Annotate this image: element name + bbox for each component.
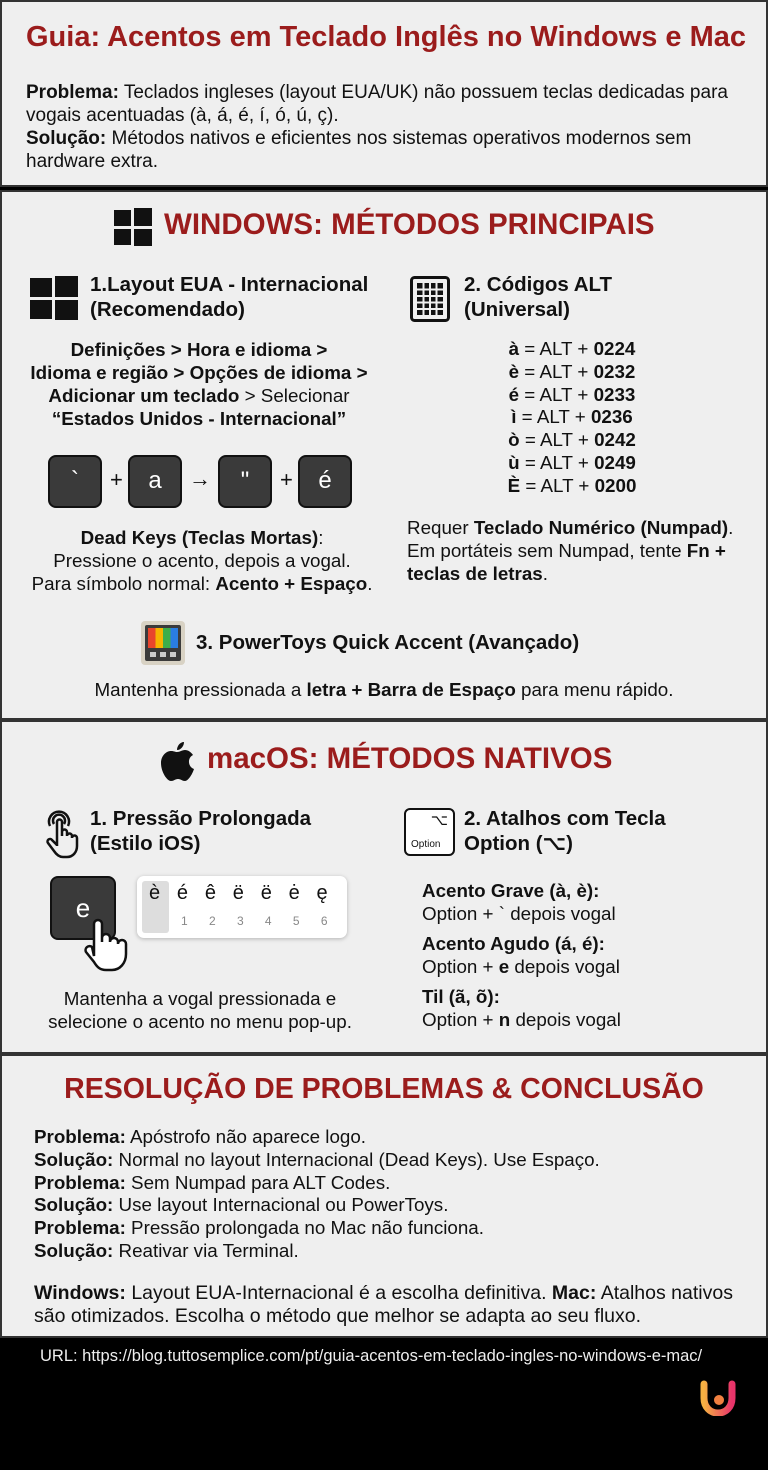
- method 1 heading: [30, 273, 368, 321]
- macos heading: macOS: MÉTODOS NATIVOS: [207, 742, 612, 775]
- intro text: Solução: Métodos nativos e eficientes nos sistemas operativos modernos sem: [26, 128, 691, 149]
- icon: apple: [161, 742, 194, 781]
- alt codes list: ì = ALT + 0236: [511, 406, 633, 427]
- footer url: URL: https://blog.tuttosemplice.com/pt/guia-acentos-em-teclado-ingles-no-windows-e-mac/: [40, 1347, 702, 1365]
- method 2 heading: [410, 273, 612, 322]
- numpad note: teclas de letras.: [407, 563, 548, 584]
- intro text: [26, 82, 728, 172]
- mac method 2 heading: 2. Atalhos com Tecla: [464, 807, 666, 830]
- panel: intro: [0, 0, 768, 187]
- method 1 steps: Adicionar um teclado > Selecionar: [48, 385, 350, 406]
- dead keys illustration: [48, 455, 352, 508]
- method 1 steps: Definições > Hora e idioma >: [71, 339, 327, 360]
- icon: option key: [404, 808, 455, 856]
- icon: windows logo: [114, 208, 152, 246]
- problems list: Problema: Apóstrofo não aparece logo.: [34, 1126, 366, 1147]
- alt codes list: ù = ALT + 0249: [508, 452, 636, 473]
- alt codes list: è = ALT + 0232: [509, 361, 635, 382]
- windows heading: WINDOWS: MÉTODOS PRINCIPAIS: [164, 208, 655, 241]
- accent popup: èéêëëėę: [149, 882, 344, 904]
- panel: macos: Option + n depois vogal: [422, 1009, 621, 1030]
- alt codes list: à = ALT + 0224: [509, 338, 635, 359]
- long press illustration: [50, 874, 350, 972]
- dead keys illustration: a: [148, 467, 162, 494]
- problems list: [34, 1126, 600, 1261]
- dead keys illustration: `: [71, 467, 79, 494]
- dead keys illustration: +: [110, 467, 123, 492]
- method 3 text: Mantenha pressionada a letra + Barra de Espaço para menu rápido.: [95, 679, 673, 700]
- numpad note: Em portáteis sem Numpad, tente Fn +: [407, 540, 726, 561]
- intro text: Problema: Teclados ingleses (layout EUA/UK) não possuem teclas dedicadas para: [26, 82, 728, 103]
- dead keys illustration: é: [318, 467, 332, 494]
- problems list: Solução: Normal no layout Internacional (Dead Keys). Use Espaço.: [34, 1149, 600, 1170]
- method 1 heading: 1.Layout EUA - Internacional: [90, 273, 368, 296]
- title: Guia: Acentos em Teclado Inglês no Windows e Mac: [26, 21, 746, 53]
- mac method 1 heading: 1. Pressão Prolongada: [90, 807, 311, 830]
- icon: numpad grid: [410, 276, 450, 322]
- alt codes list: È = ALT + 0200: [508, 475, 636, 496]
- conclusion: Windows: Layout EUA-Internacional é a escolha definitiva. Mac: Atalhos nativos: [34, 1282, 733, 1304]
- logo: [700, 1380, 736, 1416]
- dead keys illustration: →: [189, 466, 211, 491]
- problems list: Problema: Sem Numpad para ALT Codes.: [34, 1172, 390, 1193]
- dead keys explanation: Pressione o acento, depois a vogal.: [53, 550, 351, 571]
- conclusion: são otimizados. Escolha o método que melhor se adapta ao seu fluxo.: [34, 1305, 641, 1327]
- panel: macos: Option + e depois vogal: [422, 956, 620, 977]
- intro text: hardware extra.: [26, 151, 158, 172]
- panel: windows: [0, 190, 768, 720]
- intro text: vogais acentuadas (à, á, é, í, ó, ú, ç).: [26, 105, 339, 126]
- method 3 heading: [141, 621, 579, 665]
- icon: option key: Option: [411, 839, 440, 850]
- alt codes list: é = ALT + 0233: [509, 384, 635, 405]
- panel: macos: [0, 720, 768, 1054]
- dead keys illustration: ": [241, 467, 249, 494]
- method 1 steps: Idioma e região > Opções de idioma >: [30, 362, 368, 383]
- method 2 heading: 2. Códigos ALT: [464, 273, 612, 296]
- option shortcuts: Option + ` depois vogal: [422, 903, 616, 924]
- mac method 1 heading: (Estilo iOS): [90, 832, 200, 855]
- icon: tap hand: [46, 810, 78, 858]
- problems list: Solução: Reativar via Terminal.: [34, 1240, 299, 1261]
- alt codes list: [508, 338, 636, 496]
- conclusion: [34, 1282, 733, 1327]
- alt codes list: ò = ALT + 0242: [508, 429, 636, 450]
- option shortcuts: Acento Grave (à, è):: [422, 880, 599, 901]
- mac method 1 text: Mantenha a vogal pressionada e: [64, 988, 336, 1009]
- long press illustration: e: [76, 893, 90, 923]
- method 2 heading: (Universal): [464, 298, 570, 321]
- method 1 heading: (Recomendado): [90, 298, 245, 321]
- mac method 1 text: selecione o acento no menu pop-up.: [48, 1011, 352, 1032]
- mac method 2 heading: Option (⌥): [464, 832, 573, 855]
- method 1 steps: [30, 339, 368, 429]
- numpad note: Requer Teclado Numérico (Numpad).: [407, 517, 733, 538]
- problems list: Problema: Pressão prolongada no Mac não funciona.: [34, 1217, 484, 1238]
- panel: macos: Til (ã, õ):: [422, 986, 500, 1007]
- dead keys explanation: Dead Keys (Teclas Mortas):: [81, 527, 323, 548]
- icon: windows: [30, 276, 78, 320]
- accent popup: [137, 876, 347, 938]
- problems list: Solução: Use layout Internacional ou PowerToys.: [34, 1194, 448, 1215]
- dead keys explanation: [32, 527, 372, 594]
- icon: powertoys: [141, 621, 185, 665]
- mac method 1 heading: [46, 807, 312, 858]
- icon: option key: ⌥: [431, 812, 448, 829]
- dead keys illustration: +: [280, 467, 293, 492]
- troubleshooting heading: RESOLUÇÃO DE PROBLEMAS & CONCLUSÃO: [64, 1073, 704, 1105]
- accent popup: 123456: [181, 914, 349, 928]
- option shortcuts: [422, 880, 616, 924]
- dead keys explanation: Para símbolo normal: Acento + Espaço.: [32, 573, 372, 594]
- mac method 2 heading: [404, 807, 666, 856]
- panel: troubleshooting: [0, 1054, 768, 1338]
- panel: macos: Acento Agudo (á, é):: [422, 933, 605, 954]
- method 1 steps: “Estados Unidos - Internacional”: [52, 408, 346, 429]
- icon: pointer hand: [84, 918, 128, 972]
- mac method 1 text: [48, 988, 352, 1032]
- method 3 heading: 3. PowerToys Quick Accent (Avançado): [196, 631, 579, 654]
- numpad note: [407, 517, 733, 584]
